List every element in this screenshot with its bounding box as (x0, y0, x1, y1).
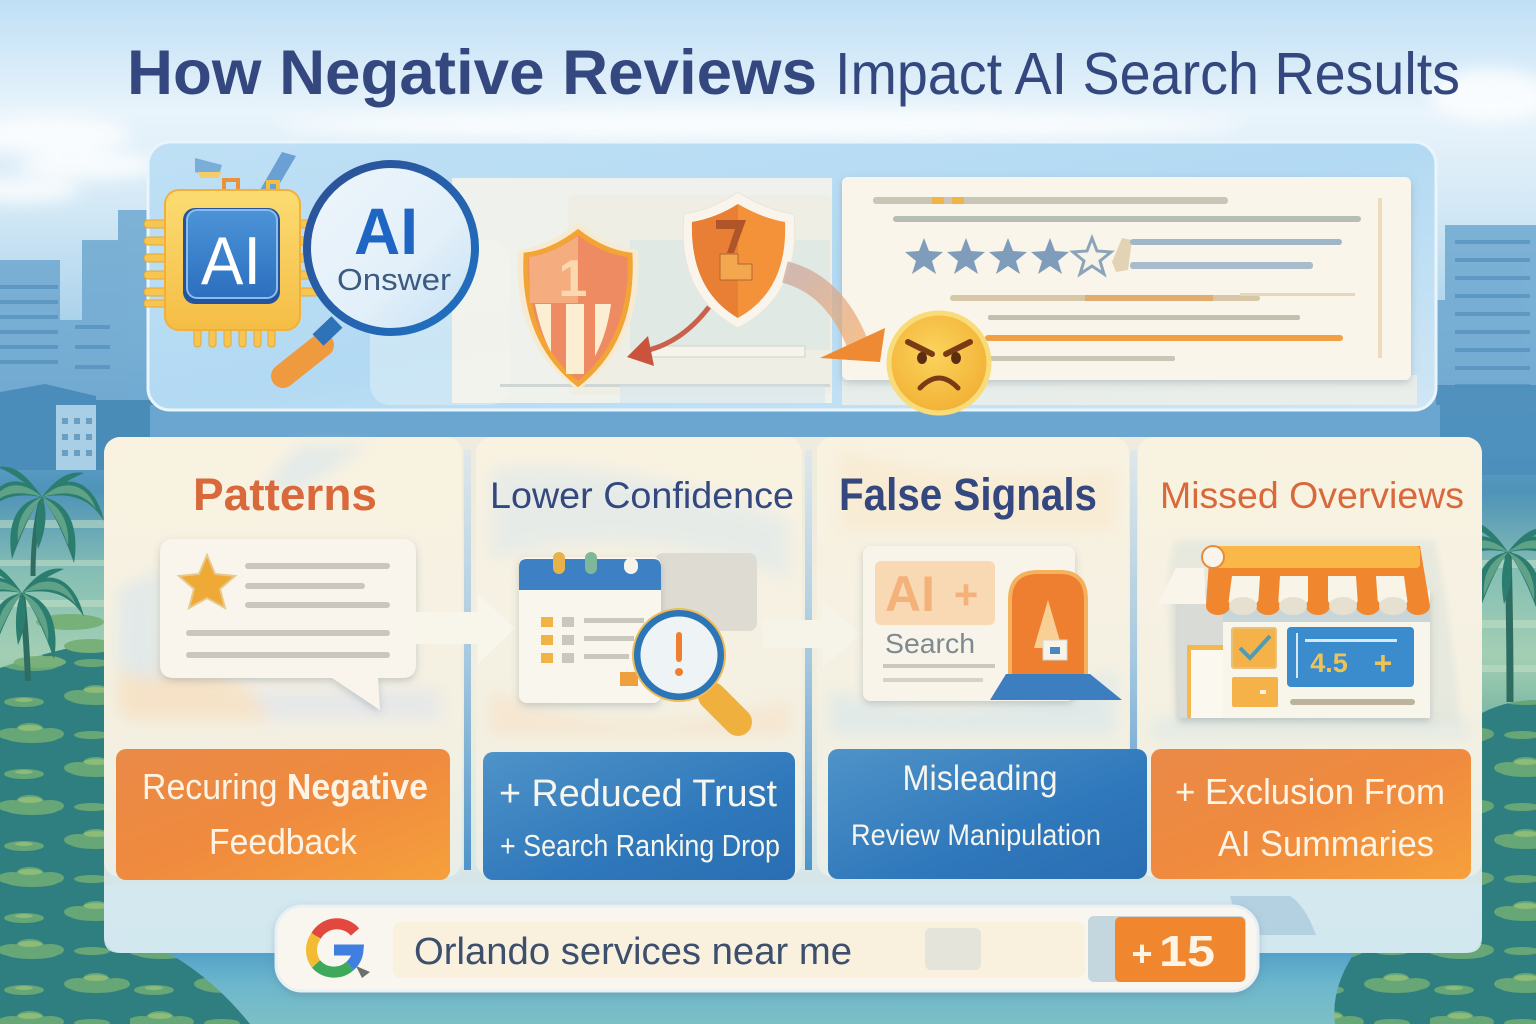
icon: AI search card with laptop: + (954, 571, 978, 618)
panel: four-column board (104, 437, 1482, 953)
callout: Exclusion From AI Summaries (1151, 749, 1471, 879)
icon: angry face (889, 313, 989, 413)
title: Impact AI Search Results (835, 41, 1460, 107)
callout: Reduced Trust, Search Ranking Drop: + Search Ranking Drop (500, 828, 780, 863)
column: Patterns (116, 469, 450, 880)
callout: Reduced Trust, Search Ranking Drop: + Reduced Trust (499, 773, 777, 815)
badge: +15: 15 (1159, 927, 1215, 976)
arrow: shield to shield red curved (627, 307, 709, 366)
callout: Misleading Review Manipulation (828, 749, 1147, 879)
forest right (1334, 700, 1536, 1024)
icon: AI chip (144, 152, 320, 347)
search bar (276, 896, 1316, 991)
palms (0, 467, 1536, 702)
pastel washes (117, 445, 1470, 740)
icon: magnifier AI answer (283, 164, 475, 376)
column: Missed Overviews (1151, 475, 1471, 879)
icon: AI search card with laptop (863, 546, 1122, 701)
callout: Recurring Negative Feedback (116, 749, 450, 880)
star rating (905, 238, 1111, 274)
title: How Negative Reviews (127, 38, 817, 108)
icon: orange shield (683, 192, 795, 328)
icon: magnifier AI answer: AI (354, 194, 418, 268)
pale field bands (0, 520, 1536, 672)
column: Lower Confidence (483, 475, 795, 880)
water band (0, 945, 1536, 1024)
badge: +15: + (1131, 933, 1153, 974)
icon: storefront with rating (1158, 540, 1460, 725)
panel: review card (842, 177, 1411, 380)
callout: Reduced Trust, Search Ranking Drop (483, 752, 795, 880)
panel: hero AI answer (144, 142, 1436, 413)
callout: Misleading Review Manipulation: Misleading (902, 759, 1058, 798)
icon: AI search card with laptop: Search (885, 628, 975, 659)
callout: Recurring Negative Feedback: Feedback (209, 821, 358, 862)
heading: False Signals: False Signals (839, 469, 1097, 520)
badge: +15 (1115, 917, 1245, 982)
skyline right (1420, 225, 1536, 455)
search query text: Orlando services near me (414, 931, 852, 973)
icon: AI chip: AI (201, 223, 261, 299)
band behind hero and board (150, 405, 1440, 440)
forest left (0, 640, 250, 1024)
icon: storefront with rating: + (1374, 645, 1392, 681)
icon: review speech bubble (160, 539, 416, 710)
heading: Missed Overviews: Missed Overviews (1160, 475, 1464, 516)
callout: Exclusion From AI Summaries: AI Summaries (1218, 823, 1434, 864)
skyline left (0, 210, 150, 450)
heading: Patterns: Patterns (193, 469, 377, 520)
icon: calendar with magnifier (519, 552, 757, 722)
arrow: shield to face orange (785, 272, 885, 362)
icon: magnifier AI answer: Onswer (337, 262, 451, 297)
arrow: Patterns to Lower Confidence (416, 594, 515, 664)
icon: striped shield with number 1: 1 (559, 250, 587, 308)
icon: striped shield with number 1 (518, 222, 638, 390)
heading: Lower Confidence: Lower Confidence (490, 475, 794, 516)
arrow: Lower Confidence to False Signals (762, 602, 862, 668)
callout: Recurring Negative Feedback: Recuring Negative (142, 766, 428, 807)
icon: AI search card with laptop: AI (885, 566, 935, 622)
icon: storefront with rating: 4.5 (1310, 648, 1348, 678)
callout: Misleading Review Manipulation: Review Manipulation (851, 819, 1101, 852)
callout: Exclusion From AI Summaries: + Exclusion From (1175, 771, 1445, 812)
icon: Google G (311, 924, 370, 978)
column: False Signals (828, 469, 1147, 879)
